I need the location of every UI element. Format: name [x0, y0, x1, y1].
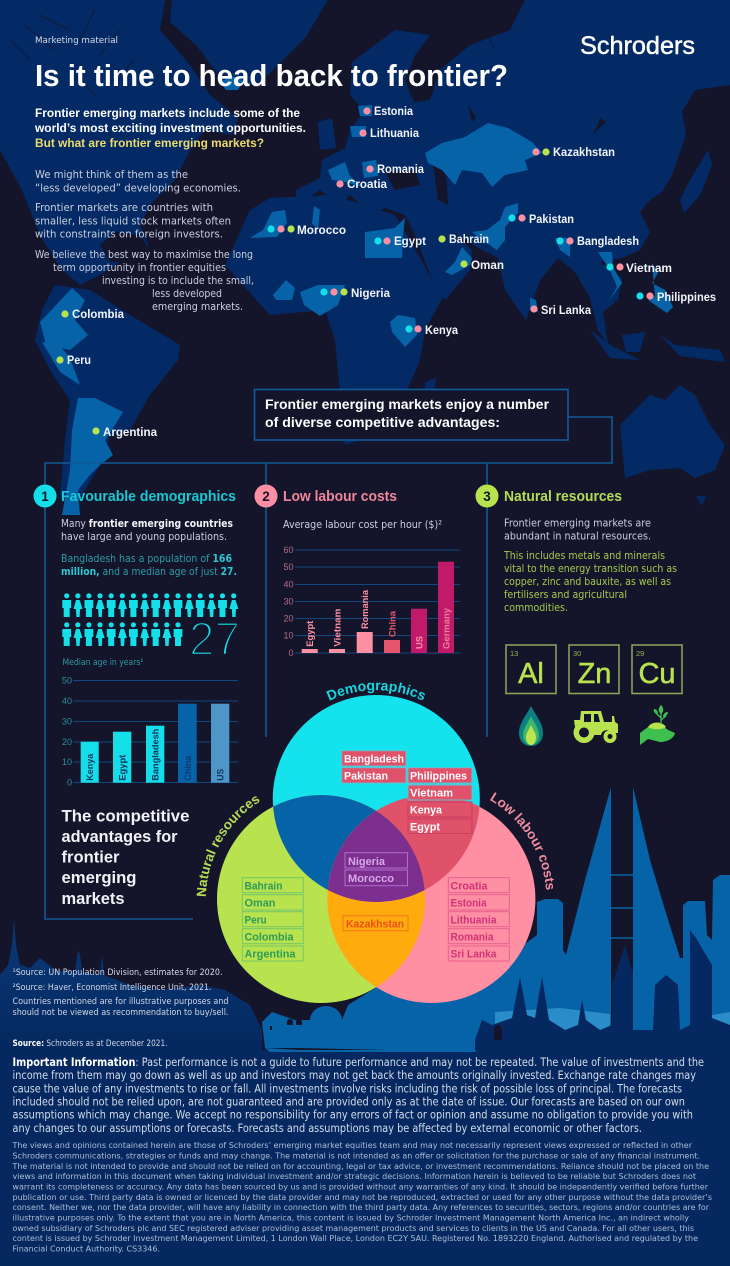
overlap: demographics and labour [328, 798, 480, 890]
chart caption: Median age in years¹ [62, 658, 144, 668]
country tags: natural resources: Oman [244, 898, 276, 910]
bar chart: labour cost [283, 545, 460, 658]
bar chart: median age: Egypt [118, 754, 128, 781]
country tags: demographics and labour [342, 751, 472, 834]
description: abundant in natural resources. [504, 530, 651, 542]
legal disclaimer: The views and opinions contained herein are those of Schroders’ emerging market equities team and may not necessarily represent views expressed or reflected in other [12, 1140, 693, 1150]
periodic table: zinc: 30 [573, 649, 581, 658]
icon: hand with plant [640, 705, 675, 745]
intro body text: emerging markets. [152, 301, 243, 313]
bar chart: median age: 0 [67, 778, 72, 788]
bar chart: labour cost: 30 [283, 596, 294, 606]
badge 2: 2 [262, 489, 270, 504]
heading: Natural resources [504, 489, 622, 505]
map labels: Egypt [394, 236, 426, 248]
description: commodities. [504, 602, 568, 614]
bar chart: median age: 40 [62, 696, 72, 706]
competitive advantages heading: advantages for [62, 828, 178, 846]
intro lead: world’s most exciting investment opportunities. [34, 121, 306, 135]
periodic table: zinc [569, 645, 619, 694]
description: million, and a median age of just 27. [61, 566, 237, 578]
legal disclaimer: Financial Conduct Authority. CS3346. [12, 1244, 160, 1254]
bar chart: labour cost: 10 [283, 630, 294, 640]
description: This includes metals and minerals [503, 550, 665, 562]
overlap: labour and natural resources [327, 810, 425, 988]
bar chart: labour cost: 40 [283, 580, 294, 590]
description [503, 518, 677, 614]
map labels: Vietnam [626, 263, 672, 275]
footnotes: ²Source: Haver, Economist Intelligence Unit, 2021. [12, 983, 212, 993]
bar chart: labour cost: Egypt [305, 620, 316, 647]
footnotes: should not be viewed as recommendation to buy/sell. [12, 1008, 228, 1018]
map labels: Estonia [374, 106, 414, 118]
caption: Average labour cost per hour ($)² [283, 519, 442, 531]
intro body text: term opportunity in frontier equities [53, 262, 226, 274]
bar chart: median age: US [216, 769, 226, 781]
map labels [56, 106, 716, 439]
intro body text: We might think of them as the [35, 169, 188, 181]
country tags: labour: Estonia [450, 898, 487, 910]
country tags: labour: Lithuania [450, 914, 497, 926]
map labels: Kazakhstan [553, 147, 615, 159]
country tags: demographics and labour: Bangladesh [344, 754, 404, 766]
bar chart: median age: Bangladesh [150, 729, 162, 781]
country tags: all three [345, 853, 408, 886]
connector frame lines [45, 417, 612, 919]
description: Frontier emerging markets are [504, 518, 651, 530]
bar chart: labour cost: US [414, 636, 426, 649]
country tags: all three: Morocco [348, 873, 394, 885]
bar chart: labour cost: 60 [283, 545, 294, 555]
intro lead [34, 106, 306, 150]
bar chart: median age: China [183, 755, 194, 781]
footnotes: ¹Source: UN Population Division, estimates for 2020. [12, 968, 222, 978]
description: Many frontier emerging countries [61, 518, 233, 530]
periodic table: zinc: Zn [578, 658, 611, 690]
bar chart: median age: 10 [62, 757, 72, 767]
bar chart: median age: Kenya [85, 753, 96, 781]
map labels: Bangladesh [577, 236, 639, 248]
badge 2 [254, 484, 278, 508]
overlap: all three [328, 811, 425, 902]
badge 3 [476, 484, 498, 508]
heading: Favourable demographics [61, 489, 236, 505]
legal disclaimer: owned subsidiary of Schroders plc and SEC registered adviser providing asset management products and services to clients in the US and Canada. For all other users, this [12, 1223, 694, 1233]
important information [12, 1056, 704, 1135]
bar chart: median age [62, 676, 238, 788]
description [61, 518, 237, 578]
marketing tag: Marketing material [35, 35, 118, 46]
legal disclaimer: Schroders communications, strategies or funds and may change. The material is not intended as an offer or solicitation for the purchase or sale of any financial instrument. [12, 1150, 700, 1160]
map labels: Argentina [103, 427, 158, 439]
competitive advantages heading: The competitive [62, 808, 190, 826]
venn diagram [196, 682, 554, 1003]
bar chart: labour cost: Romania [360, 589, 371, 629]
title: Is it time to head back to frontier? [35, 58, 508, 93]
competitive advantages heading [62, 808, 190, 908]
country tags: natural resources: Bahrain [244, 880, 283, 892]
curved label: low labour: Low labour costs [490, 792, 554, 890]
legal disclaimer: content is issued by Schroder Investment Management Limited, 1 London Wall Place, London EC2Y 5AU. Registered No. 1893220 England. Authorised and regulated by the [12, 1233, 698, 1243]
map labels: Bahrain [449, 234, 489, 246]
map labels: Romania [377, 164, 425, 176]
country tags: labour [448, 878, 509, 961]
country tags: demographics and labour: Kenya [410, 804, 443, 816]
intro body text: smaller, less liquid stock markets often [35, 216, 231, 228]
country tags: natural resources: Colombia [244, 932, 294, 944]
map labels: Pakistan [529, 214, 574, 226]
bar chart: labour cost: 0 [288, 648, 294, 658]
intro body text: “less developed” developing economies. [35, 182, 241, 194]
map labels: Nigeria [351, 288, 391, 300]
curved label: demographics: Demographics [326, 682, 425, 700]
big number 27: 27 [189, 612, 240, 665]
bar chart: labour cost: Vietnam [332, 609, 344, 647]
map labels: Morocco [297, 225, 346, 237]
map labels: Sri Lanka [541, 305, 592, 317]
skyline [0, 787, 730, 1052]
intro body text: We believe the best way to maximise the long [35, 249, 253, 261]
legal disclaimer: The material is not intended to provide and should not be relied on for accounting, legal or tax advice, or investment recommendations. Reliance should not be placed on the [12, 1161, 709, 1171]
legal disclaimer: consent. Neither we, nor the data provider, will have any liability in connection with the third party data. Any references to securities, sectors, regions and/or countries are for [12, 1202, 710, 1212]
map labels: Lithuania [370, 128, 420, 140]
curved label: natural resources: Natural resources [196, 796, 260, 896]
bar chart: median age: 30 [62, 716, 72, 726]
important information: any changes to our assumptions or forecasts. Forecasts and assumptions may be affected by external economic or other factors. [12, 1122, 642, 1135]
bar chart: labour cost: China [388, 610, 398, 637]
intro body text: investing is to include the small, [102, 275, 254, 287]
country tags: natural resources: Argentina [244, 948, 296, 960]
country tags: labour: Croatia [450, 880, 488, 892]
country tags: all three: Nigeria [348, 856, 386, 868]
circle: natural resources [217, 795, 425, 1003]
circle: low labour costs [327, 795, 535, 1003]
periodic table: aluminium [506, 645, 556, 694]
map labels: Kenya [425, 325, 459, 337]
competitive advantages heading: frontier [62, 848, 120, 866]
intro body text: with constraints on foreign investors. [35, 228, 223, 240]
periodic table: aluminium: 13 [510, 649, 518, 658]
icon: tractor [574, 711, 618, 743]
bar chart: labour cost: 20 [283, 614, 294, 624]
periodic table: copper [632, 645, 682, 694]
intro lead: Frontier emerging markets include some of the [35, 106, 300, 120]
heading box: Frontier emerging markets enjoy a number [265, 397, 550, 412]
circle: demographics [273, 695, 480, 902]
periodic table: aluminium: Al [518, 658, 544, 690]
footnotes: Source: Schroders as at December 2021. [12, 1039, 168, 1049]
logo: Schroders: Schroders [580, 32, 695, 60]
bar chart: labour cost: Germany [442, 607, 452, 649]
country tags: labour: Romania [450, 932, 494, 944]
competitive advantages heading: markets [62, 890, 124, 908]
overlap: demographics and natural resources [273, 795, 376, 890]
heading box: of diverse competitive advantages: [265, 415, 500, 430]
description: copper, zinc and bauxite, as well as [504, 576, 671, 588]
panel: low labour costs [254, 484, 460, 658]
highlighted countries [40, 76, 673, 515]
country tags: demographics and labour: Egypt [410, 822, 440, 834]
country tags: demographics and labour: Pakistan [344, 770, 388, 782]
description: vital to the energy transition such as [504, 563, 677, 575]
bar chart: median age: 20 [62, 737, 72, 747]
legal disclaimer [12, 1140, 712, 1254]
intro body text [35, 169, 254, 313]
panel: natural resources [476, 484, 682, 746]
legal disclaimer: views and information in this document when taking individual investment and/or strategic decisions. Information herein is believed to be reliable but Schroders does not [12, 1171, 697, 1181]
map labels: Philippines [657, 292, 716, 304]
country tags: demographics and labour: Philippines [410, 770, 467, 782]
country tags: natural resources [242, 878, 303, 961]
map labels: Croatia [347, 179, 388, 191]
legal disclaimer: publication or use. Third party data is owned or licenced by the data provider and may not be reproduced, extracted or used for any other purpose without the data provider’s [12, 1192, 712, 1202]
country tags: natural resources: Peru [244, 914, 266, 926]
intro lead: But what are frontier emerging markets? [35, 136, 264, 150]
icon: gas flame [519, 706, 543, 746]
badge 1 [34, 484, 56, 508]
footnotes: Countries mentioned are for illustrative purposes and [12, 997, 228, 1007]
heading: Low labour costs [283, 489, 397, 505]
competitive advantages heading: emerging [62, 869, 136, 887]
bar chart: median age: 50 [62, 676, 72, 686]
badge 1: 1 [41, 489, 49, 504]
world map [0, 0, 730, 515]
map labels: Colombia [72, 309, 125, 321]
legal disclaimer: warrant its completeness or accuracy. Any data has been sourced by us and is provided without any warranties of any kind. It should be independently verified before further [12, 1182, 709, 1192]
badge 3: 3 [483, 489, 491, 504]
footnotes [12, 968, 228, 1049]
description: fertilisers and agricultural [504, 589, 627, 601]
intro body text: less developed [152, 288, 222, 300]
legal disclaimer: illustrative purposes only. To the extent that you are in North America, this content is issued by Schroder Investment Management North America Inc., an indirect wholly [12, 1212, 689, 1222]
panel: favourable demographics [34, 484, 240, 788]
description: have large and young populations. [61, 531, 227, 543]
people pictogram [62, 593, 238, 646]
description: Bangladesh has a population of 166 [61, 553, 232, 565]
intro body text: Frontier markets are countries with [35, 202, 213, 214]
country tag: Kazakhstan: Kazakhstan [346, 918, 404, 930]
footer band [0, 1050, 730, 1266]
country tags: labour: Sri Lanka [450, 948, 497, 960]
periodic table: copper: Cu [638, 658, 676, 690]
periodic table: copper: 29 [636, 649, 644, 658]
country tags: demographics and labour: Vietnam [410, 788, 453, 800]
heading box [254, 390, 568, 440]
bar chart: labour cost: 50 [283, 562, 294, 572]
map labels: Peru [67, 355, 91, 367]
map labels: Oman [471, 260, 504, 272]
